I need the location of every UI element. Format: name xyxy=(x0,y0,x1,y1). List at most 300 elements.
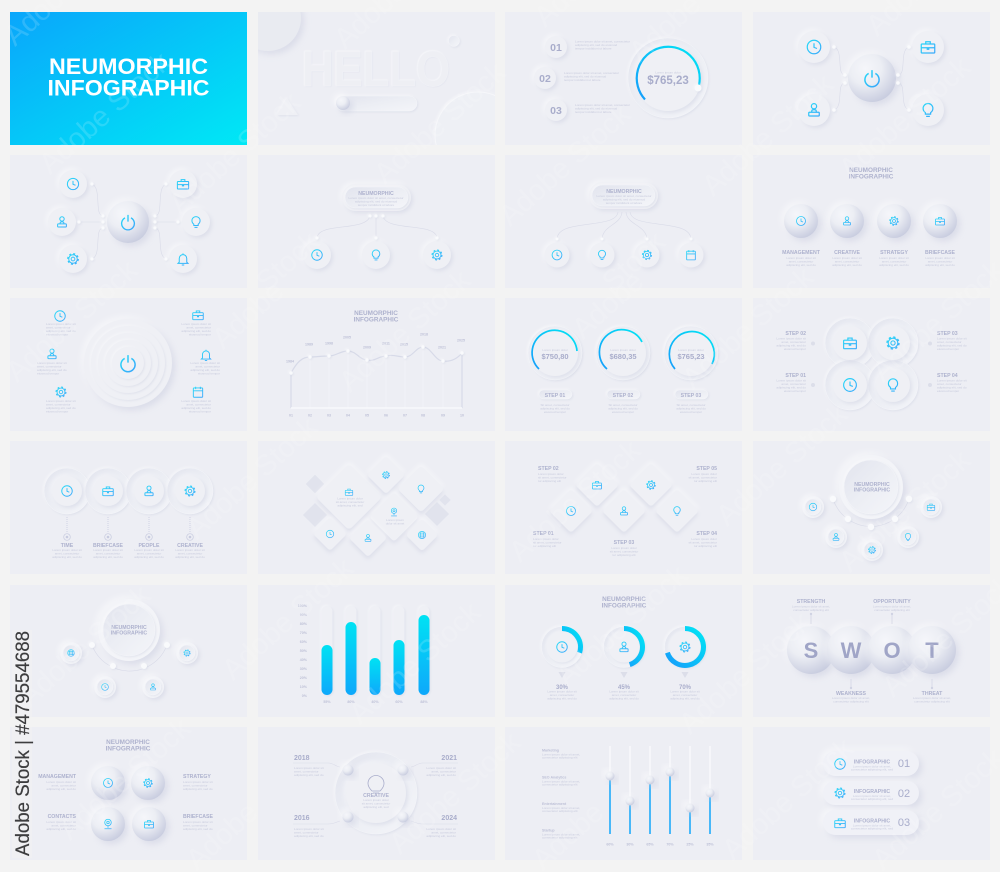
item: creative xyxy=(175,476,205,559)
stock watermarks: Adobe Stock xyxy=(550,559,694,693)
label: briefcase: BRIEFCASE xyxy=(183,814,214,820)
line chart: 2018 xyxy=(420,332,428,336)
item: time: Lorem ipsum dolor sit xyxy=(52,548,82,552)
year 2021: adipiscing elit, sed do xyxy=(426,773,456,777)
orbit knobs xyxy=(89,642,170,669)
line chart: 04 xyxy=(346,414,350,418)
gauge: step 02: eiusmod tempor xyxy=(612,410,634,414)
item: creative: adipiscing elit, sed do xyxy=(175,555,205,559)
axis labels: 80% xyxy=(300,622,308,626)
panel: orbit with four nodes xyxy=(10,585,247,717)
gauge: step 03: Sit amet, consectetur xyxy=(676,403,706,407)
panel: gauge with numbered items xyxy=(505,12,742,145)
orbit knobs xyxy=(830,496,912,530)
panel: three gauges xyxy=(505,298,742,431)
node: clock xyxy=(303,241,331,269)
pill heading xyxy=(589,182,658,209)
line chart: 03 xyxy=(327,414,331,418)
slider 30% xyxy=(626,746,634,846)
label: step 04: tur adipiscing elit xyxy=(694,544,717,548)
pill heading: tempor incididunt ut labore xyxy=(606,201,643,205)
sphere T: T xyxy=(925,638,939,663)
node: bulb xyxy=(362,241,390,269)
label: step 01: STEP 01 xyxy=(785,373,806,379)
label: step 02: Lorem ipsum dolor sit xyxy=(776,336,806,340)
label: step 02: amet, consectetur xyxy=(781,340,806,344)
gauge: $765,23 xyxy=(647,75,689,87)
panel: donut percentages xyxy=(505,585,742,717)
sphere O: O xyxy=(883,638,901,663)
node: gear xyxy=(861,539,883,561)
label: step 02 xyxy=(538,466,567,483)
label: briefcase xyxy=(183,814,214,831)
item: briefcase xyxy=(181,311,211,336)
left labels: Entertainment xyxy=(542,802,567,806)
label: management: adipiscing elit, sed do xyxy=(46,787,76,791)
item: creative: Lorem ipsum dolor sit xyxy=(832,256,862,260)
line chart: 2021 xyxy=(438,346,446,350)
label: step 03: adipiscing elit, sed do xyxy=(937,344,967,348)
line chart: 2015 xyxy=(400,342,408,346)
left labels: consectetur adipiscing elit xyxy=(542,836,578,840)
year 2018: 2018 xyxy=(294,755,310,762)
item: people: adipiscing elit, sed do xyxy=(134,555,164,559)
item: strategy: adipiscing elit, sed do xyxy=(879,263,909,267)
label: step 03: sit amet, consectetur xyxy=(610,550,638,554)
left labels: Lorem ipsum dolor sit amet, xyxy=(542,780,580,784)
year 2024: adipiscing elit, sed do xyxy=(426,834,456,838)
node: clock xyxy=(802,496,824,518)
item: clock: Lorem ipsum dolor sit xyxy=(46,322,76,326)
gauge: step 01 xyxy=(528,326,582,414)
panel: five step diamonds xyxy=(505,441,742,574)
bar 55%: 55% xyxy=(323,700,331,704)
diamond: briefcase xyxy=(575,463,619,507)
label: management: amet, consectetur xyxy=(51,784,76,788)
year 2018: Lorem ipsum dolor sit xyxy=(294,766,324,770)
connector dots xyxy=(77,182,180,261)
stock watermarks: Adobe Stock xyxy=(673,606,817,740)
label: briefcase: adipiscing elit, sed do xyxy=(183,827,213,831)
label: step 01 xyxy=(533,531,562,548)
label: contacts: CONTACTS xyxy=(48,814,77,820)
slider 35%: 35% xyxy=(706,842,714,846)
pill heading: Lorem ipsum dolor sit amet, consectetur xyxy=(596,194,652,198)
centre ring: NEUMORPHIC xyxy=(854,482,890,488)
pill 03: 03 xyxy=(898,817,910,829)
label: opportunity xyxy=(873,599,911,624)
panel: sliders xyxy=(505,727,742,860)
connectors xyxy=(79,184,178,259)
label: step 05: sit amet, consectetur xyxy=(688,476,717,480)
bar 40%: 40% xyxy=(371,700,379,704)
embossed hello word: HELLO xyxy=(302,41,450,97)
left labels: consectetur adipiscing elit xyxy=(542,756,578,760)
item: bell: Lorem ipsum dolor sit xyxy=(190,361,220,365)
label: step 02: sit amet, consectetur xyxy=(538,476,567,480)
label: weakness: consectetur adipiscing elit xyxy=(833,700,869,704)
donut 30%: amet, consectetur xyxy=(550,693,574,697)
central sphere xyxy=(107,201,149,243)
label: opportunity: Lorem ipsum dolor sit amet, xyxy=(873,604,911,608)
item: people: Lorem ipsum dolor sit xyxy=(134,548,164,552)
line chart: 05 xyxy=(365,414,369,418)
item: people: PEOPLE xyxy=(138,543,160,549)
title: NEUMORPHIC xyxy=(354,310,398,317)
donut 70%: Lorem ipsum dolor sit xyxy=(670,690,700,694)
gauge: step 02 xyxy=(596,326,650,414)
label: step 01: Lorem ipsum dolor xyxy=(533,537,559,541)
item: clock: adipiscing elit, sed do xyxy=(46,329,76,333)
label: step 01: sit amet, consectetur xyxy=(533,540,562,544)
label: step 02: eiusmod tempor xyxy=(784,347,806,351)
stock watermarks: Adobe Stock xyxy=(216,552,360,686)
label: contacts: adipiscing elit, sed do xyxy=(46,827,76,831)
axis labels: 10% xyxy=(300,685,308,689)
item: gear: Lorem ipsum dolor sit xyxy=(46,399,76,403)
label: contacts: amet, consectetur xyxy=(51,824,76,828)
item: calendar: Lorem ipsum dolor sit xyxy=(181,399,211,403)
item: creative: adipiscing elit, sed do xyxy=(832,263,862,267)
diamond: briefcase text: sit amet, consectetur xyxy=(336,500,364,504)
title: INFOGRAPHIC xyxy=(106,746,151,752)
leader lines xyxy=(293,763,458,824)
item: bell: amet, consectetur xyxy=(195,364,220,368)
connectors xyxy=(317,216,437,238)
diamond: pin xyxy=(369,492,419,542)
diamond: pin: dolor sit amet xyxy=(386,522,404,526)
stock watermarks: Adobe Stock xyxy=(163,86,307,220)
circle: gear xyxy=(876,326,910,360)
node: bulb xyxy=(912,94,944,126)
stock watermarks: Adobe Stock xyxy=(833,51,977,185)
line chart: 08 xyxy=(421,414,425,418)
sphere S xyxy=(787,626,835,674)
label: step 04 xyxy=(688,531,717,548)
label: step 03: STEP 03 xyxy=(614,540,634,546)
title: INFOGRAPHIC xyxy=(602,602,647,610)
gauge: step 02: STEP 02 xyxy=(613,393,633,399)
diamond: gear xyxy=(629,463,673,507)
donut 45%: 45% xyxy=(618,685,631,691)
stock watermarks: Adobe Stock xyxy=(13,579,157,713)
panel: timeline ring xyxy=(258,727,495,860)
label: step 04: STEP 04 xyxy=(937,373,958,379)
left labels: consectetur adipiscing elit xyxy=(542,809,578,813)
left labels: Startup xyxy=(542,828,555,832)
centre ring xyxy=(839,455,903,519)
label: strategy: adipiscing elit, sed do xyxy=(183,787,213,791)
year 2024: amet, consectetur xyxy=(431,830,456,834)
line chart: 07 xyxy=(403,414,407,418)
bar 80% xyxy=(346,606,356,704)
centre ring: INFOGRAPHIC xyxy=(111,630,147,636)
diamond: bulb xyxy=(398,466,444,512)
pill heading: adipiscing elit, sed do eiusmod xyxy=(603,198,645,202)
node: person xyxy=(48,208,76,236)
centre label: Lorem ipsum dolor xyxy=(363,798,389,802)
item: briefcase: Lorem ipsum dolor sit xyxy=(181,322,211,326)
year 2016: Lorem ipsum dolor sit xyxy=(294,827,324,831)
donut 45% xyxy=(604,626,644,700)
label: step 04: eiusmod tempor xyxy=(937,389,959,393)
axis labels: 70% xyxy=(300,631,308,635)
donut 45%: Lorem ipsum dolor sit xyxy=(609,690,639,694)
diamond: clock xyxy=(549,489,593,533)
node: clock xyxy=(544,242,570,268)
diamond: bulb xyxy=(655,489,699,533)
item: briefcase: adipiscing elit, sed do xyxy=(93,555,123,559)
stock watermarks: Adobe Stock xyxy=(343,596,487,730)
item: clock xyxy=(46,311,76,336)
axis labels: 40% xyxy=(300,658,308,662)
left labels: Lorem ipsum dolor sit amet, xyxy=(542,752,580,756)
label: step 04: STEP 04 xyxy=(696,531,717,537)
panel: concentric circles xyxy=(10,298,247,431)
pill 01: consectetur adipiscing elit, sed xyxy=(851,768,893,772)
donut 30%: 30% xyxy=(556,685,569,691)
slider 35% xyxy=(706,746,714,846)
label: strength xyxy=(792,599,830,624)
slider track xyxy=(336,96,417,111)
pill 01: 01 xyxy=(898,758,910,770)
pill 03: consectetur adipiscing elit, sed xyxy=(851,826,893,830)
item: person: amet, consectetur xyxy=(37,364,62,368)
label: strength: STRENGTH xyxy=(797,599,826,605)
item: gear xyxy=(46,387,76,414)
item 02: adipiscing elit, sed do eiusmod xyxy=(564,74,606,78)
title xyxy=(849,167,894,180)
circle: briefcase xyxy=(833,326,867,360)
axis labels: 60% xyxy=(300,640,308,644)
node: gear xyxy=(634,242,660,268)
left labels xyxy=(542,748,580,840)
item: gear: adipiscing elit, sed do xyxy=(46,406,76,410)
item: calendar xyxy=(181,387,211,414)
label: step 02: STEP 02 xyxy=(785,331,806,337)
label: briefcase: Lorem ipsum dolor sit xyxy=(183,820,213,824)
slider 25%: 25% xyxy=(686,842,694,846)
item: briefcase: BRIEFCASE xyxy=(925,250,956,256)
stock watermarks: Adobe Stock xyxy=(503,434,647,568)
pill heading: adipiscing elit, sed do eiusmod xyxy=(355,200,397,204)
pill heading: NEUMORPHIC xyxy=(606,189,642,195)
donut 30%: adipiscing elit, sed do xyxy=(547,696,577,700)
diamond: briefcase text: adipiscing elit, sed xyxy=(337,504,363,508)
node: globe xyxy=(60,642,82,664)
sphere: clock xyxy=(91,766,125,800)
label: step 01: amet, consectetur xyxy=(781,382,806,386)
stock watermarks: Adobe Stock xyxy=(180,411,324,545)
item: creative xyxy=(830,204,864,267)
title xyxy=(106,739,151,752)
label: step 02 xyxy=(776,331,815,351)
sphere S: S xyxy=(804,638,818,663)
panel: three pills xyxy=(753,727,990,860)
pill 03: INFOGRAPHIC xyxy=(854,818,890,824)
item: clock: amet, consectetur xyxy=(46,326,71,330)
axis labels: 30% xyxy=(300,667,308,671)
donut 45%: amet, consectetur xyxy=(612,693,636,697)
item: briefcase: adipiscing elit, sed do xyxy=(181,329,211,333)
item: briefcase: amet, consectetur xyxy=(928,260,952,264)
gauge: step 02: adipiscing elit, sed do xyxy=(608,406,638,410)
item 01: Lorem ipsum dolor sit amet, consectetur xyxy=(575,40,630,44)
label: step 03: amet, consectetur xyxy=(937,340,962,344)
label: weakness: WEAKNESS xyxy=(836,691,867,697)
item: bell xyxy=(190,350,220,376)
item: strategy: STRATEGY xyxy=(880,250,908,256)
stock watermarks: Adobe Stock xyxy=(368,56,512,190)
item: time: adipiscing elit, sed do xyxy=(52,555,82,559)
connectors xyxy=(557,212,691,239)
pill heading: tempor incididunt ut labore xyxy=(358,203,395,207)
line chart: 06 xyxy=(384,414,388,418)
year 2016: amet, consectetur xyxy=(294,830,319,834)
year 2018: adipiscing elit, sed do xyxy=(294,773,324,777)
line chart: 09 xyxy=(441,414,445,418)
inset corner circle xyxy=(435,92,495,145)
circle: clock xyxy=(833,368,867,402)
gauge: step 01: Sit amet, consectetur xyxy=(540,403,570,407)
node: gear xyxy=(59,245,87,273)
item 01: tempor incididunt ut labore xyxy=(575,46,612,50)
label: step 01: tur adipiscing elit xyxy=(533,544,556,548)
inset rings xyxy=(825,318,918,410)
pill 02: 02 xyxy=(898,788,910,800)
pill 02: INFOGRAPHIC xyxy=(854,789,890,795)
item: strategy: Lorem ipsum dolor sit xyxy=(879,256,909,260)
pill 02: consectetur adipiscing elit, sed xyxy=(851,797,893,801)
item 01 xyxy=(545,36,630,58)
panel: hello xyxy=(258,12,462,117)
axis labels: 100% xyxy=(298,604,308,608)
item: bell: eiusmod tempor xyxy=(198,372,220,376)
label: step 04: sit amet, consectetur xyxy=(688,540,717,544)
stock watermarks: Adobe Stock xyxy=(53,712,197,846)
node: briefcase xyxy=(169,170,197,198)
label: step 03: STEP 03 xyxy=(937,331,958,337)
panel: four node hub xyxy=(753,12,990,145)
year 2024 xyxy=(426,815,457,838)
stock watermarks: Adobe Stock xyxy=(710,398,854,532)
linked ring row xyxy=(44,468,213,514)
item 02 xyxy=(534,67,619,89)
line chart: 2025 xyxy=(457,338,465,342)
panel: six node hub xyxy=(10,155,247,288)
item 01: 01 xyxy=(550,42,562,54)
label: weakness xyxy=(832,679,870,704)
node: person xyxy=(142,676,164,698)
heading: neumorphic infographic: NEUMORPHIC xyxy=(49,54,208,79)
node: calendar xyxy=(678,242,704,268)
item: person: adipiscing elit, sed do xyxy=(37,368,67,372)
node: gear xyxy=(176,642,198,664)
line chart: 1984 xyxy=(286,360,294,364)
pill 01: Lorem ipsum dolor sit amet, xyxy=(853,764,891,768)
donut 70%: adipiscing elit, sed do xyxy=(670,696,700,700)
item 02: tempor incididunt ut labore xyxy=(564,78,601,82)
label: step 04: Lorem ipsum dolor sit xyxy=(937,378,967,382)
stock watermarks: Adobe Stock xyxy=(833,444,977,578)
sphere: briefcase xyxy=(132,807,166,841)
label: step 03: Lorem ipsum dolor sit xyxy=(937,336,967,340)
item: briefcase: amet, consectetur xyxy=(186,326,211,330)
item: management: MANAGEMENT xyxy=(782,250,821,256)
stock watermarks: Adobe xyxy=(206,275,290,355)
item: time: amet, consectetur xyxy=(55,552,79,556)
diamond: pin: Lorem ipsum xyxy=(386,518,404,522)
panel: four step circles xyxy=(753,298,990,431)
panel: vertical bar chart xyxy=(258,585,495,717)
year 2021: Lorem ipsum dolor sit xyxy=(426,766,456,770)
label: step 01: adipiscing elit, sed do xyxy=(776,386,806,390)
line chart: 02 xyxy=(308,414,312,418)
item: calendar: eiusmod tempor xyxy=(189,410,211,414)
gauge: step 03: eiusmod tempor xyxy=(680,410,702,414)
raised corner circle xyxy=(258,12,304,54)
orbit arc xyxy=(92,645,167,671)
label: management: MANAGEMENT xyxy=(38,774,77,780)
stock watermarks: Adobe Stock xyxy=(716,732,860,866)
label: step 04: adipiscing elit, sed do xyxy=(937,386,967,390)
label: management xyxy=(38,774,77,791)
item: management: adipiscing elit, sed do xyxy=(786,263,816,267)
central sphere xyxy=(848,54,896,102)
item: calendar: amet, consectetur xyxy=(186,402,211,406)
label: step 01 xyxy=(776,373,815,393)
bar 40% xyxy=(370,606,380,704)
label: step 05 xyxy=(688,466,717,483)
item: person xyxy=(37,349,67,376)
item 03: 03 xyxy=(550,105,562,117)
pill heading xyxy=(342,184,411,211)
bar 55% xyxy=(322,606,332,704)
item: people xyxy=(134,476,164,559)
item: briefcase xyxy=(93,476,124,559)
label: step 04 xyxy=(928,373,967,393)
item: briefcase: amet, consectetur xyxy=(96,552,120,556)
node: clock xyxy=(798,31,830,63)
diamond: person xyxy=(602,489,646,533)
axis labels: 90% xyxy=(300,613,308,617)
line chart: 1989 xyxy=(305,342,313,346)
bar 80%: 80% xyxy=(347,700,355,704)
gauge xyxy=(628,38,708,118)
diamond: gear xyxy=(367,456,405,494)
item: bell: adipiscing elit, sed do xyxy=(190,368,220,372)
stock watermarks: Adobe Stock xyxy=(696,68,840,202)
sphere T xyxy=(908,626,956,674)
panel: cover title xyxy=(10,12,247,145)
line chart: 2009 xyxy=(363,346,371,350)
pill 02: Lorem ipsum dolor sit amet, xyxy=(853,794,891,798)
slider 60%: 60% xyxy=(606,842,614,846)
gauge: step 01: Lorem ipsum dolor xyxy=(542,348,568,352)
donut 70%: 70% xyxy=(679,685,692,691)
stock watermarks: Adobe Stock xyxy=(333,264,477,398)
connector dots xyxy=(556,238,692,240)
line chart: 2011 xyxy=(382,342,390,346)
label: step 02: tur adipiscing elit xyxy=(538,479,561,483)
axis labels: 50% xyxy=(300,649,308,653)
node: gear xyxy=(423,241,451,269)
gauge: step 02: Sit amet, consectetur xyxy=(608,403,638,407)
sphere O xyxy=(868,626,916,674)
stock watermarks: Adobe Stock xyxy=(676,261,820,395)
label: step 02: STEP 02 xyxy=(538,466,559,472)
year 2016: 2016 xyxy=(294,815,310,822)
